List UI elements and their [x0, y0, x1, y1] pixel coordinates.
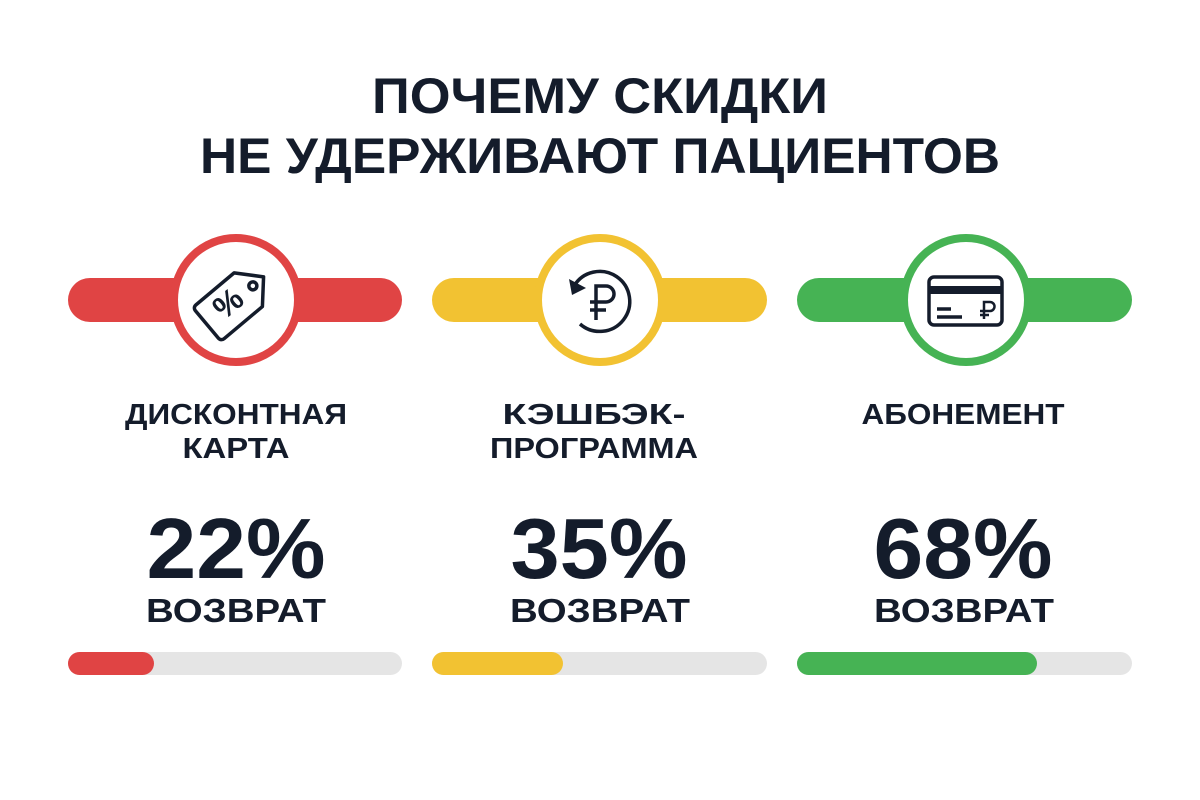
- progress bar: [797, 652, 1132, 675]
- label: ДИСКОНТНАЯ: [125, 399, 347, 431]
- label: КЭШБЭК-: [502, 399, 686, 431]
- panel: cashback: [432, 238, 767, 675]
- stat 68%: ВОЗВРАТ: [874, 592, 1054, 629]
- title: [200, 68, 1000, 184]
- stat 22%: ВОЗВРАТ: [146, 592, 326, 629]
- header band green: [797, 278, 1132, 322]
- title: ПОЧЕМУ СКИДКИ: [372, 68, 828, 124]
- label: [490, 399, 698, 465]
- label: АБОНЕМЕНТ: [862, 399, 1065, 431]
- label: КАРТА: [182, 433, 290, 465]
- label: [125, 399, 347, 465]
- header band red: [68, 278, 402, 322]
- progress bar: [432, 652, 767, 675]
- header band yellow: [432, 278, 767, 322]
- panel: subscription: [797, 238, 1132, 675]
- icon: percent tag: [174, 238, 298, 362]
- stat 68%: 68%: [874, 502, 1052, 597]
- progress bar: [68, 652, 402, 675]
- icon: cashback ruble: [538, 238, 662, 362]
- icon: card: [904, 238, 1028, 362]
- panel: discount card: [68, 238, 402, 675]
- icon: percent tag: %: [206, 280, 250, 326]
- title: НЕ УДЕРЖИВАЮТ ПАЦИЕНТОВ: [200, 128, 1000, 184]
- stat 35%: ВОЗВРАТ: [510, 592, 690, 629]
- label: ПРОГРАММА: [490, 433, 698, 465]
- stat 22%: 22%: [146, 502, 326, 597]
- stat 35%: 35%: [510, 502, 688, 597]
